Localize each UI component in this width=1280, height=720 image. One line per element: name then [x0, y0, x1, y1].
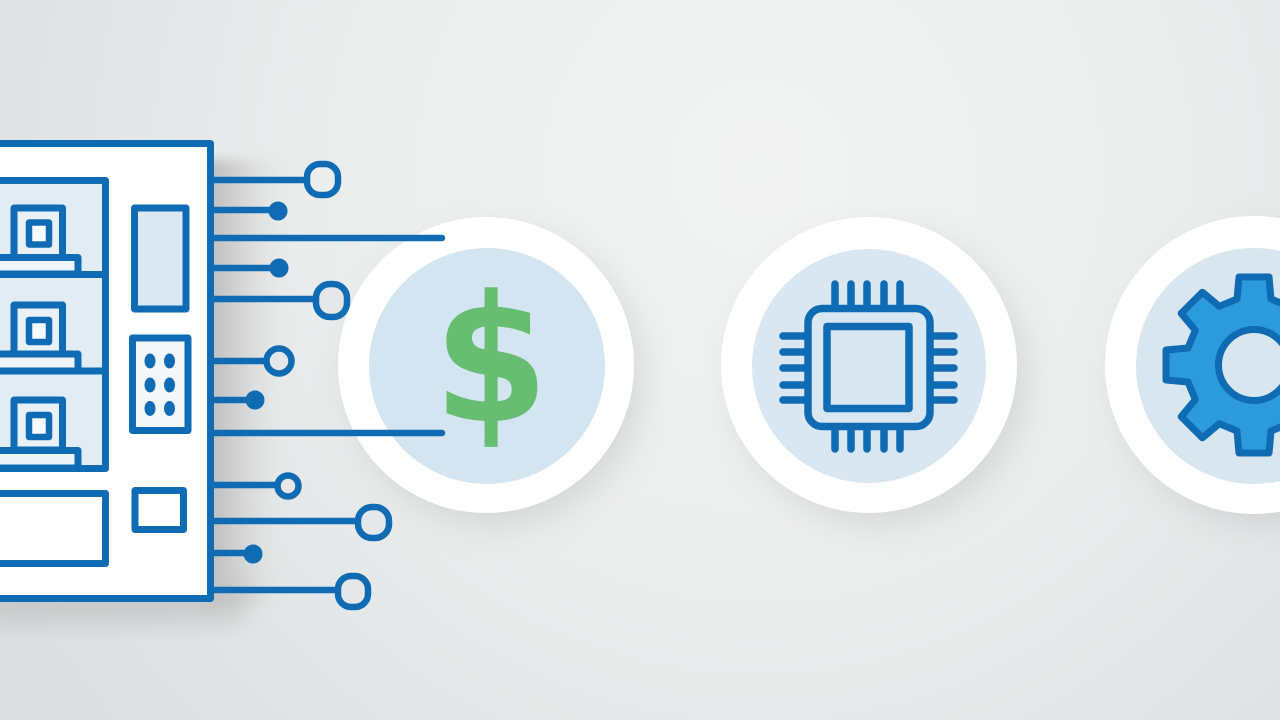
- display panel: [134, 208, 186, 309]
- money circle: [338, 217, 642, 524]
- machine shadow: [0, 160, 290, 620]
- icon: dollar sign: $: [433, 258, 549, 463]
- circuit connectors: [212, 164, 389, 607]
- product 3: [0, 400, 78, 468]
- product 1: [0, 208, 78, 274]
- gear circle: [1105, 216, 1280, 524]
- long connectors into money circle: [212, 238, 442, 433]
- coin slot: [135, 490, 184, 530]
- machine body: [0, 144, 210, 598]
- shelf dividers: [0, 274, 105, 371]
- product 2: [0, 305, 78, 371]
- lower dispenser slot: [0, 494, 106, 564]
- icon: microchip: [783, 284, 954, 449]
- icon: gear: [1166, 277, 1280, 453]
- chip circle: [721, 217, 1026, 524]
- keypad: [132, 338, 188, 430]
- shelf panel: [0, 180, 106, 468]
- vending machine: [0, 144, 210, 598]
